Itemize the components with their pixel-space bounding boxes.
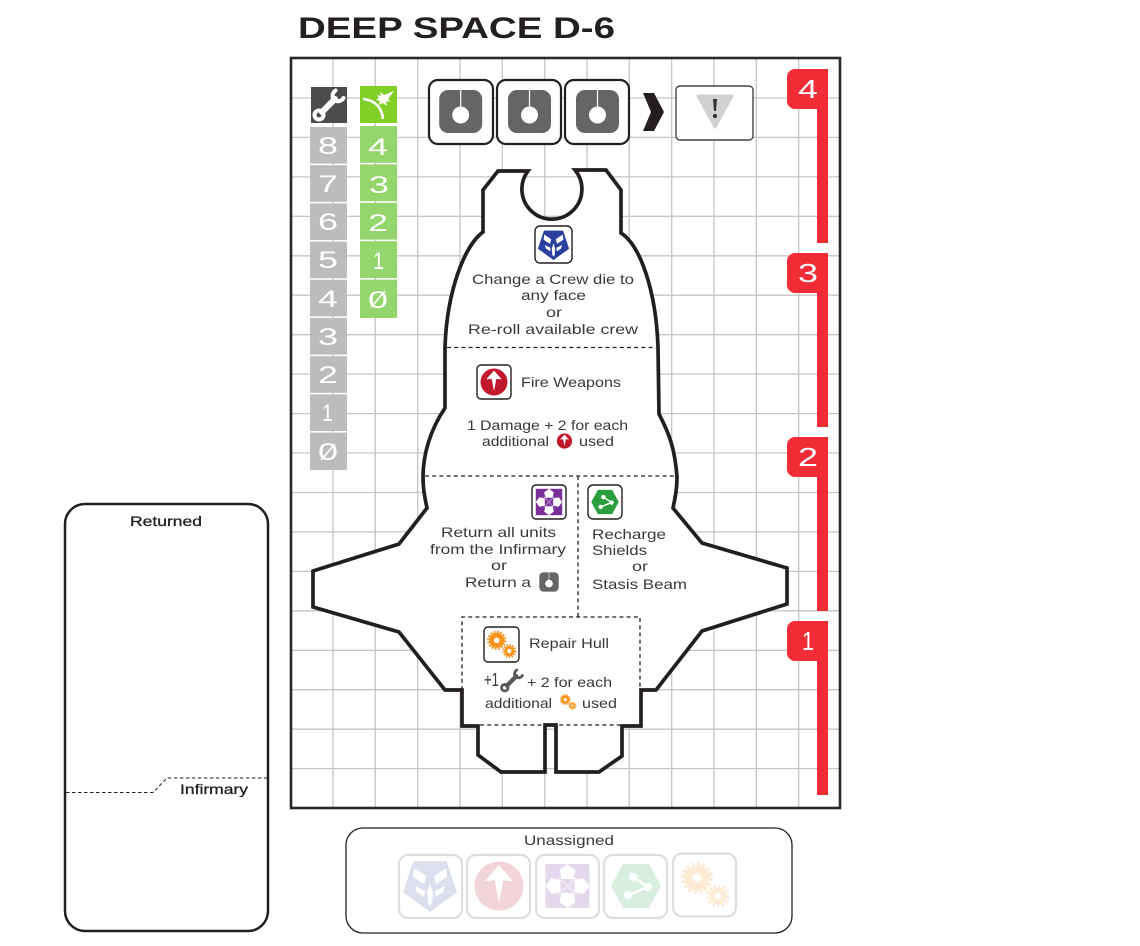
icon: threat die 1 [429, 80, 493, 144]
shield values: 0 [368, 287, 388, 314]
text: damage rule: used [579, 433, 614, 449]
red damage tracks [787, 69, 828, 795]
panel: unassigned [346, 828, 792, 933]
track 3 [787, 253, 828, 427]
hull values [310, 127, 347, 470]
icon: threat die 3 [565, 80, 629, 144]
panel: returned and infirmary [65, 504, 268, 931]
text: medical action: Return all units [441, 524, 556, 540]
label: returned: Returned [130, 513, 202, 529]
shield track [360, 86, 397, 318]
text: damage rule: 1 Damage + 2 for each [467, 417, 628, 433]
section: science [588, 485, 687, 592]
hull values: 7 [318, 171, 338, 198]
section: tactical / commander [468, 226, 639, 337]
text: science action: Stasis Beam [592, 576, 687, 592]
text: science action: Recharge [592, 526, 666, 542]
text: science action: Shields [592, 542, 647, 558]
text: repair hull: Repair Hull [529, 635, 609, 651]
shield values [360, 126, 397, 318]
label: unassigned: Unassigned [524, 832, 614, 848]
icon: faded engineering [673, 854, 736, 916]
text: commander action: or [546, 304, 562, 320]
icon: shield impact header [360, 86, 397, 123]
hull values: 6 [318, 209, 338, 236]
track 4: 4 [798, 74, 818, 104]
shield values: 2 [368, 210, 388, 237]
text: repair rule: +1 [484, 670, 499, 690]
icon: science crew [588, 485, 622, 519]
hull values: 2 [318, 362, 338, 389]
hull damage track [310, 87, 347, 470]
text: medical action [430, 524, 566, 592]
text: medical action: from the Infirmary [430, 541, 566, 557]
text: commander action: any face [521, 287, 586, 303]
shield values: 4 [368, 134, 388, 161]
shield values: 1 [373, 248, 384, 275]
section dividers [425, 348, 675, 725]
text: commander action: Re-roll available crew [468, 321, 639, 337]
section: engineering [484, 627, 617, 711]
text: commander action: Change a Crew die to [472, 271, 634, 287]
icon: faded commander [399, 855, 462, 918]
icon: threat die 2 [497, 80, 561, 144]
track 2 [787, 437, 828, 611]
hull values: 4 [318, 286, 338, 313]
track 1 [787, 621, 828, 795]
text: repair rule: additional [485, 695, 552, 711]
text: science action: or [632, 558, 648, 574]
ship outline [313, 170, 787, 772]
icon: tactical crew [477, 365, 511, 399]
hull values: 1 [322, 400, 333, 427]
icon: faded medical [536, 855, 599, 918]
text: medical action: or [491, 557, 507, 573]
icon: faded tactical [467, 855, 530, 918]
text: repair rule: used [582, 695, 617, 711]
text: repair rule: + 2 for each [527, 674, 612, 690]
label: infirmary: Infirmary [180, 781, 248, 797]
icon: engineering crew [484, 627, 519, 662]
text: medical action: Return a [465, 574, 531, 590]
icon: threat card [676, 86, 753, 140]
text: damage rule [467, 417, 628, 449]
title: DEEP SPACE D-6 [298, 12, 615, 45]
hull values: 5 [318, 247, 338, 274]
section: fire weapons [467, 365, 628, 449]
text: science action [592, 526, 687, 592]
text: fire weapons: Fire Weapons [521, 374, 621, 390]
text: repair rule [484, 670, 617, 711]
hull values: 8 [318, 133, 338, 160]
icon: wrench header [311, 87, 347, 123]
icon: medical crew [532, 485, 566, 519]
hull values: 3 [318, 324, 338, 351]
text: damage rule: additional [482, 433, 549, 449]
track 3: 3 [798, 258, 818, 288]
panel: ship board [291, 58, 840, 808]
arrow: chevron [643, 93, 664, 131]
text: commander action [468, 271, 639, 337]
icon: commander crew [535, 226, 572, 263]
track 2: 2 [798, 442, 818, 472]
track 4 [787, 69, 828, 243]
track 1: 1 [802, 626, 814, 656]
hull values: 0 [318, 439, 338, 466]
icon: faded science [604, 855, 667, 918]
section: medical [430, 485, 566, 592]
shield values: 3 [369, 172, 389, 199]
threat dice row [429, 80, 629, 144]
